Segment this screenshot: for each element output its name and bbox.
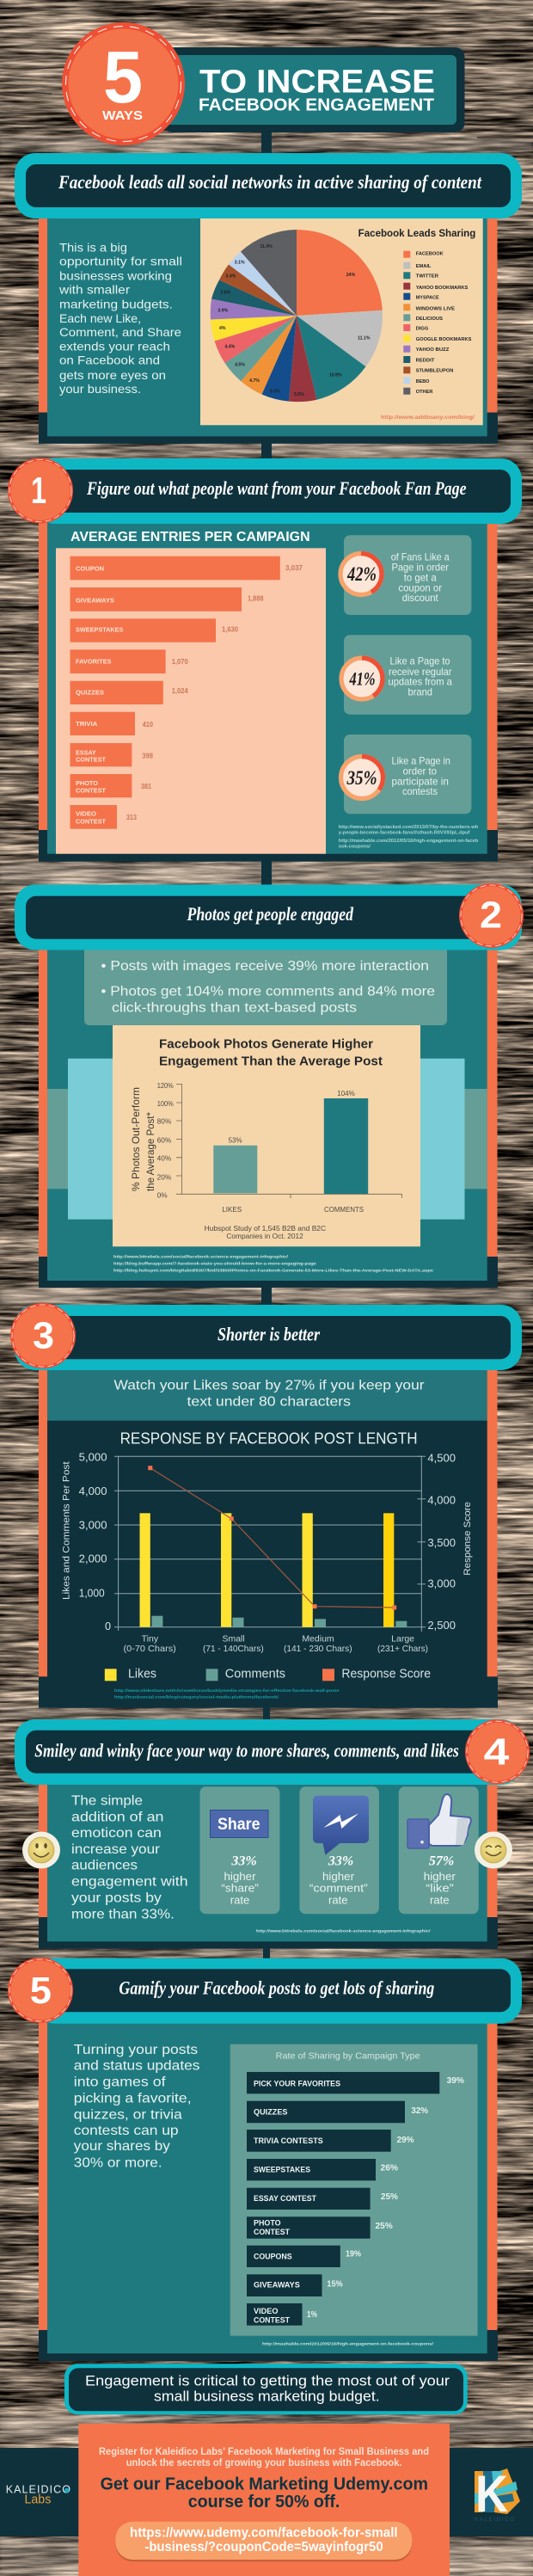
pie chart: 3.9% bbox=[217, 309, 229, 314]
stat box: 41%: brand bbox=[407, 685, 432, 698]
chart title bbox=[159, 1037, 383, 1068]
bar chart: average entries: CONTEST bbox=[76, 755, 106, 763]
chart: photos engagement: 104% bbox=[337, 1090, 355, 1097]
stat box: 41%: updates from a bbox=[389, 676, 452, 688]
chart: response by post length: Large bbox=[391, 1634, 414, 1645]
chart: response by post length: 2,000 bbox=[79, 1553, 107, 1565]
stat box: 42% bbox=[340, 535, 471, 615]
call to action: Register for Kaleidico Labs' Facebook Marketing for Small Business and bbox=[99, 2447, 429, 2457]
chart: photos engagement: 120% bbox=[157, 1082, 174, 1090]
bar chart: rate of sharing: Rate of Sharing by Campaign Type bbox=[276, 2050, 420, 2061]
badge: 2 bbox=[459, 883, 524, 948]
stat box: 42%: to get a bbox=[404, 572, 437, 584]
intro text: on Facebook and bbox=[59, 354, 160, 367]
sources: http://mashable.com/2012/05/16/high-engagement-on-faceb bbox=[339, 839, 478, 844]
stat box: 35%: order to bbox=[402, 765, 437, 777]
bar chart: rate of sharing: 39% bbox=[447, 2076, 464, 2086]
intro text: Watch your Likes soar by 27% if you keep your bbox=[113, 1379, 425, 1393]
stat card: like: “like” bbox=[426, 1882, 454, 1894]
sources: y-people-become-facebook-fans/#sthash.R0VX93pL.dpuf bbox=[339, 830, 470, 835]
pie chart: 3.8% bbox=[220, 291, 231, 296]
sources bbox=[113, 1255, 434, 1273]
stat card: comment: “comment” bbox=[309, 1882, 368, 1894]
bar chart: rate of sharing: TRIVIA CONTESTS bbox=[254, 2136, 323, 2145]
bar chart: rate of sharing: ESSAY CONTEST bbox=[254, 2194, 316, 2203]
chart: photos engagement: 100% bbox=[157, 1100, 174, 1108]
chart: response by post length: RESPONSE BY FACEBOOK POST LENGTH bbox=[120, 1430, 418, 1448]
bar chart: rate of sharing: PHOTO bbox=[254, 2218, 281, 2227]
badge: 5 ways: WAYS bbox=[102, 108, 143, 123]
chart: response by post length: Tiny bbox=[142, 1634, 159, 1645]
panel: step 3 bbox=[39, 1368, 498, 1708]
call to action: course for 50% off. bbox=[188, 2493, 340, 2511]
pie chart: 5.0% bbox=[270, 390, 280, 395]
panel: intro bbox=[39, 215, 498, 444]
bar chart: rate of sharing bbox=[230, 2044, 478, 2336]
bar chart: average entries: 313 bbox=[126, 814, 137, 821]
sources: ook-coupons/ bbox=[339, 844, 371, 849]
gamify text bbox=[74, 2043, 199, 2170]
intro text: your business. bbox=[59, 382, 141, 396]
chart: photos engagement: 20% bbox=[157, 1173, 171, 1181]
bar chart: average entries: FAVORITES bbox=[76, 657, 112, 665]
chart title: Engagement Than the Average Post bbox=[159, 1054, 383, 1068]
bar chart: average entries: CONTEST bbox=[76, 787, 106, 795]
gamify text: picking a favorite, bbox=[74, 2092, 192, 2106]
banner: step 2 bbox=[15, 883, 524, 950]
pie legend: DELICIOUS bbox=[416, 317, 443, 322]
main title line: TO INCREASE bbox=[199, 64, 435, 100]
chart: photos engagement: 80% bbox=[157, 1118, 171, 1126]
bar chart: average entries: SWEEPSTAKES bbox=[76, 626, 123, 634]
intro text: Comment, and Share bbox=[59, 325, 181, 339]
intro text: marketing budgets. bbox=[59, 297, 173, 310]
response score line bbox=[148, 1466, 396, 1610]
bar chart: rate of sharing: 32% bbox=[411, 2106, 428, 2116]
chart: response by post length: 5,000 bbox=[79, 1452, 107, 1464]
axes bbox=[176, 1084, 401, 1198]
banner: step 3: Shorter is better bbox=[217, 1323, 320, 1344]
chart: photos engagement: Hubspot Study of 1,545 B2B and B2C bbox=[205, 1224, 326, 1233]
pie chart: 4% bbox=[219, 326, 226, 331]
gamify text: and status updates bbox=[74, 2059, 199, 2074]
logo: k mark: KALEIDICO bbox=[475, 2518, 514, 2523]
intro text bbox=[113, 1379, 425, 1409]
banner: step 5 bbox=[8, 1958, 522, 2024]
logo: kaleidico labs: Labs bbox=[24, 2493, 51, 2506]
emoticon text: your posts by bbox=[71, 1891, 162, 1906]
badge: 5 ways bbox=[62, 22, 185, 145]
connector bbox=[263, 1946, 270, 1961]
chart: response by post length: 3,500 bbox=[427, 1537, 456, 1549]
stat card: comment: higher bbox=[322, 1871, 354, 1883]
logo: kaleidico labs bbox=[6, 2484, 70, 2506]
stat card: comment: rate bbox=[328, 1895, 348, 1907]
connector bbox=[263, 1705, 270, 1722]
pie chart: 24% bbox=[346, 273, 356, 278]
pie legend: YAHOO BUZZ bbox=[416, 347, 450, 353]
pie chart: 5.5% bbox=[294, 392, 304, 397]
y axis title bbox=[130, 1087, 156, 1191]
likes bars bbox=[139, 1513, 394, 1627]
stat box: 42%: discount bbox=[402, 592, 438, 604]
sources: http://tracksocial.com/blog/category/social-media-platforms/facebook/ bbox=[114, 1694, 279, 1699]
badge: 2: 2 bbox=[480, 895, 502, 936]
chart: response by post length: Small bbox=[222, 1634, 245, 1645]
chart: photos engagement: 53% bbox=[229, 1136, 242, 1144]
stat card: share: rate bbox=[230, 1895, 249, 1907]
intro text: This is a big bbox=[59, 240, 127, 254]
stat card: share: “share” bbox=[221, 1882, 259, 1894]
chart: photos engagement bbox=[113, 1025, 420, 1246]
chart: photos engagement: LIKES bbox=[222, 1206, 242, 1214]
bar chart: average entries: PHOTO bbox=[76, 779, 98, 787]
chart: photos engagement: COMMENTS bbox=[324, 1206, 364, 1214]
stat box: 35%: contests bbox=[402, 785, 438, 797]
badge: 4 bbox=[465, 1719, 530, 1784]
bars bbox=[213, 1146, 257, 1193]
bar chart: average entries bbox=[56, 548, 326, 854]
bar chart: average entries: 410 bbox=[143, 721, 153, 729]
stat box: 35%: Like a Page in bbox=[392, 755, 450, 767]
banner: intro heading: Facebook leads all social networks in active sharing of content bbox=[58, 171, 482, 193]
bar chart: average entries: ESSAY bbox=[76, 748, 96, 756]
legend: Response Score bbox=[341, 1667, 431, 1681]
pie chart bbox=[211, 230, 383, 402]
icon: smiley bbox=[22, 1832, 60, 1868]
intro text bbox=[58, 240, 182, 396]
sources: http://blog.hubspot.com/blog/tabid/6307/bid/33800/Photos-on-Facebook-Generate-53-More-Likes-Than-the-Average-Post-NEW-DATA.aspx bbox=[113, 1269, 434, 1273]
sources: http://www.sociallystacked.com/2013/07/by-the-numbers-wh bbox=[339, 825, 478, 830]
chart: response by post length: 3,000 bbox=[427, 1578, 456, 1590]
bars bbox=[324, 1098, 368, 1194]
pie legend bbox=[403, 251, 472, 395]
call to action: unlock the secrets of growing your business with Facebook. bbox=[126, 2458, 401, 2468]
emoticon text: more than 33%. bbox=[71, 1907, 175, 1921]
intro text: with smaller bbox=[58, 283, 130, 297]
footer strip bbox=[0, 2448, 533, 2536]
chart: response by post length: (71 - 140Chars) bbox=[203, 1644, 264, 1654]
sources: http://blog.bufferapp.com/7-facebook-stats-you-should-know-for-a-more-engaging-page bbox=[113, 1262, 316, 1266]
stat box: 42%: of Fans Like a bbox=[391, 551, 450, 563]
pie chart: 4.7% bbox=[249, 378, 260, 384]
bar chart heading: AVERAGE ENTRIES PER CAMPAIGN bbox=[70, 530, 310, 544]
gridlines and axes bbox=[114, 1456, 426, 1632]
stat box: 41% bbox=[341, 635, 471, 715]
chart: response by post length: 0 bbox=[105, 1620, 111, 1632]
bar chart: rate of sharing: VIDEO bbox=[254, 2307, 279, 2315]
bar chart: average entries: VIDEO bbox=[76, 810, 96, 818]
gamify text: into games of bbox=[74, 2075, 166, 2089]
stat card: share: higher bbox=[224, 1871, 256, 1883]
bullet box: • Photos get 104% more comments and 84% more bbox=[101, 985, 435, 999]
stat card: like bbox=[399, 1786, 479, 1914]
chart: facebook leads sharing bbox=[200, 215, 483, 425]
pie chart: 11.1% bbox=[358, 335, 371, 341]
pie legend: WINDOWS LIVE bbox=[416, 306, 455, 311]
badge: 4: 4 bbox=[484, 1731, 510, 1774]
bar chart: average entries: 398 bbox=[142, 752, 154, 760]
chart: photos engagement: Companies in Oct. 2012 bbox=[226, 1232, 303, 1240]
emoticon text: audiences bbox=[71, 1859, 138, 1873]
intro text: opportunity for small bbox=[59, 255, 182, 268]
y axis titles: Likes and Comments Per Post bbox=[62, 1461, 72, 1600]
stat box: 35%: participate in bbox=[392, 775, 449, 787]
gamify text: your shares by bbox=[74, 2139, 170, 2154]
pie chart: 3.1% bbox=[235, 261, 245, 266]
bar chart: average entries: CONTEST bbox=[76, 818, 106, 826]
comments bars bbox=[151, 1616, 407, 1627]
bar chart: average entries: 1,630 bbox=[222, 626, 239, 633]
stat box: 42%: 42% bbox=[346, 563, 377, 585]
url button bbox=[115, 2522, 412, 2561]
stat card: share bbox=[199, 1786, 279, 1914]
intro text: Each new Like, bbox=[59, 311, 141, 325]
pie legend: MYSPACE bbox=[416, 296, 439, 301]
intro text: text under 80 characters bbox=[187, 1394, 351, 1409]
stat card: like: rate bbox=[430, 1895, 450, 1907]
banner: step 5: Gamify your Facebook posts to get lots of sharing bbox=[119, 1977, 434, 1998]
bar chart: average entries: COUPON bbox=[76, 564, 104, 572]
bar chart: rate of sharing: 15% bbox=[327, 2280, 343, 2290]
sources: http://www.bitrebels.com/social/facebook-science-engagement-infographic/ bbox=[113, 1255, 289, 1259]
source: http://www.bitrebels.com/social/facebook-science-engagement-infographic/ bbox=[256, 1929, 431, 1934]
badge: 5: 5 bbox=[30, 1970, 52, 2012]
chart title: Facebook Photos Generate Higher bbox=[159, 1037, 373, 1051]
bar chart: average entries: TRIVIA bbox=[76, 720, 98, 728]
emoticon text: engagement with bbox=[71, 1874, 188, 1889]
chart: response by post length: 4,000 bbox=[427, 1494, 456, 1506]
bullet box: • Posts with images receive 39% more interaction bbox=[101, 959, 429, 974]
pie chart: 11.4% bbox=[260, 244, 273, 249]
url button: -business/?couponCode=5wayinfogr50 bbox=[144, 2540, 383, 2554]
panel: step 1 bbox=[39, 520, 498, 862]
bullet box: click-throughs than text-based posts bbox=[112, 1001, 357, 1016]
legend: Likes bbox=[128, 1667, 156, 1681]
banner: step 1 bbox=[8, 458, 522, 524]
gamify text: 30% or more. bbox=[74, 2155, 162, 2170]
pie chart: 3.4% bbox=[225, 274, 236, 279]
icon: share button: Share bbox=[217, 1816, 260, 1834]
connector bbox=[261, 440, 272, 461]
bar chart: rate of sharing: 19% bbox=[346, 2250, 361, 2259]
pie legend: OTHER bbox=[416, 390, 433, 395]
bar chart: rate of sharing: 25% bbox=[375, 2222, 393, 2231]
stat card: comment bbox=[299, 1786, 379, 1914]
chart: response by post length: (141 - 230 Chars) bbox=[284, 1644, 352, 1654]
stat card: like: higher bbox=[424, 1871, 456, 1883]
pie chart: 10.8% bbox=[329, 373, 342, 378]
panel: step 5 bbox=[39, 2020, 498, 2361]
call to action bbox=[78, 2424, 450, 2576]
logo: kaleidico labs: KALEIDICO bbox=[6, 2484, 70, 2496]
stat box: 35%: 35% bbox=[346, 767, 377, 789]
bar chart: rate of sharing: 26% bbox=[380, 2164, 398, 2173]
bar chart: rate of sharing: SWEEPSTAKES bbox=[254, 2166, 310, 2174]
pie legend: EMAIL bbox=[416, 264, 432, 269]
y axis titles bbox=[62, 1461, 473, 1600]
icon: thumbs up bbox=[407, 1794, 471, 1848]
y axis title: % Photos Out-Perform bbox=[130, 1087, 142, 1191]
closing callout bbox=[64, 2364, 468, 2414]
chart: response by post length: 4,500 bbox=[427, 1452, 456, 1464]
closing callout: small business marketing budget. bbox=[154, 2388, 380, 2405]
chart: response by post length bbox=[62, 1430, 473, 1681]
icon: happy face bbox=[475, 1832, 512, 1868]
stat box: 41%: 41% bbox=[349, 667, 375, 690]
stat box: 35% bbox=[340, 735, 471, 814]
header bbox=[62, 22, 464, 157]
chart: facebook leads sharing: Facebook Leads Sharing bbox=[358, 229, 475, 239]
pie legend: TWITTER bbox=[416, 274, 439, 280]
emoticon text: The simple bbox=[71, 1794, 143, 1809]
chart: response by post length: (231+ Chars) bbox=[377, 1644, 428, 1654]
banner: step 2: Photos get people engaged bbox=[187, 903, 354, 925]
badge: 3: 3 bbox=[33, 1315, 54, 1357]
stat box: 42%: coupon or bbox=[398, 581, 442, 593]
badge: 1 bbox=[8, 458, 73, 523]
bar chart: rate of sharing: CONTEST bbox=[254, 2228, 290, 2236]
pie chart: 4.5% bbox=[235, 363, 245, 368]
gamify text: quizzes, or trivia bbox=[74, 2107, 182, 2122]
pie chart: 4.4% bbox=[224, 345, 236, 350]
bar chart: rate of sharing: COUPONS bbox=[254, 2252, 292, 2260]
stat box: 42%: Page in order bbox=[392, 561, 449, 573]
bar chart: rate of sharing: PICK YOUR FAVORITES bbox=[254, 2079, 340, 2087]
bar chart: rate of sharing: CONTEST bbox=[254, 2315, 290, 2324]
legend bbox=[105, 1667, 431, 1681]
bar chart: average entries: 3,037 bbox=[285, 564, 303, 572]
logo: k mark: K bbox=[475, 2465, 508, 2523]
gamify text: contests can up bbox=[74, 2124, 179, 2138]
chart: response by post length: 1,000 bbox=[79, 1587, 105, 1599]
call to action: Get our Facebook Marketing Udemy.com bbox=[101, 2475, 428, 2493]
emoticon text bbox=[71, 1794, 188, 1921]
sources bbox=[339, 825, 478, 849]
bar chart: average entries: QUIZZES bbox=[76, 689, 104, 697]
sources: http://www.slideshare.net/chriswellsson/buddymedia-strategies-for-effective-facebook-wall-posts bbox=[114, 1688, 340, 1693]
pie legend: STUMBLEUPON bbox=[416, 369, 453, 374]
stat card: like: 57% bbox=[429, 1854, 454, 1868]
banner: step 4 bbox=[15, 1719, 530, 1785]
intro text: gets more eyes on bbox=[59, 368, 166, 382]
bar chart: rate of sharing: 25% bbox=[381, 2192, 398, 2202]
badge: 5 ways: 5 bbox=[103, 37, 143, 119]
connector bbox=[261, 1285, 272, 1307]
banner: step 3 bbox=[10, 1303, 522, 1370]
pie legend: YAHOO BOOKMARKS bbox=[416, 286, 469, 291]
intro text: businesses working bbox=[59, 269, 172, 283]
closing callout: Engagement is critical to getting the most out of your bbox=[85, 2372, 450, 2388]
bar chart: rate of sharing: 1% bbox=[307, 2310, 317, 2320]
banner: intro heading bbox=[15, 153, 522, 218]
chart: photos engagement: 40% bbox=[157, 1155, 171, 1163]
stat card: comment: 33% bbox=[328, 1854, 353, 1868]
stat card: share: 33% bbox=[230, 1854, 257, 1868]
stat box: 41%: receive regular bbox=[389, 666, 452, 678]
chart: response by post length: 3,000 bbox=[79, 1520, 107, 1532]
bar chart: average entries: 1,070 bbox=[172, 658, 188, 666]
bullet box bbox=[84, 946, 447, 1025]
main title second line: FACEBOOK ENGAGEMENT bbox=[199, 96, 434, 115]
intro text: extends your reach bbox=[59, 340, 170, 354]
bar chart: average entries: GIVEAWAYS bbox=[76, 596, 114, 604]
pie legend: FACEBOOK bbox=[416, 251, 444, 256]
emoticon text: addition of an bbox=[71, 1810, 163, 1824]
pie legend: REDDIT bbox=[416, 358, 435, 363]
chart: response by post length: 2,500 bbox=[427, 1620, 456, 1632]
badge: 5 bbox=[8, 1958, 73, 2023]
gamify text: Turning your posts bbox=[74, 2043, 198, 2057]
icon: share button bbox=[210, 1810, 268, 1837]
connector bbox=[261, 858, 272, 888]
bar chart: rate of sharing: 29% bbox=[397, 2136, 414, 2145]
badge: 3 bbox=[10, 1303, 76, 1368]
source url: http://www.addtoany.com/blog/ bbox=[381, 415, 475, 421]
chart: response by post length: 4,000 bbox=[79, 1485, 107, 1497]
panel: step 4 bbox=[22, 1780, 512, 1949]
y axis titles: Response Score bbox=[463, 1502, 473, 1576]
bar chart: rate of sharing: GIVEAWAYS bbox=[254, 2280, 300, 2289]
emoticon text: increase your bbox=[71, 1842, 161, 1857]
url button: https://www.udemy.com/facebook-for-small bbox=[130, 2525, 398, 2540]
y axis title: the Average Post* bbox=[144, 1112, 156, 1191]
panel: step 2 bbox=[39, 946, 498, 1288]
bar chart: average entries: 381 bbox=[141, 783, 151, 790]
bar chart: average entries: 1,024 bbox=[172, 687, 188, 695]
emoticon text: emoticon can bbox=[71, 1826, 162, 1841]
pie legend: BEBO bbox=[416, 379, 430, 384]
bar chart: rate of sharing: QUIZZES bbox=[254, 2107, 287, 2116]
chart: photos engagement: 60% bbox=[157, 1136, 171, 1144]
chart: response by post length: Medium bbox=[302, 1634, 334, 1645]
sources bbox=[114, 1688, 340, 1699]
chart: photos engagement: 0% bbox=[157, 1191, 168, 1199]
bar chart: average entries: 1,888 bbox=[248, 595, 264, 602]
stat box: 41%: Like a Page to bbox=[390, 655, 450, 667]
pie legend: GOOGLE BOOKMARKS bbox=[416, 337, 472, 342]
pie legend: DIGG bbox=[416, 326, 429, 331]
legend: Comments bbox=[225, 1667, 285, 1681]
icon: comment bubble bbox=[313, 1796, 369, 1855]
chart: response by post length: (0-70 Chars) bbox=[124, 1644, 176, 1654]
source: http://mashable.com/2012/05/16/high-engagement-on-facebook-coupons/ bbox=[262, 2342, 434, 2347]
badge: 1: 1 bbox=[31, 470, 46, 512]
